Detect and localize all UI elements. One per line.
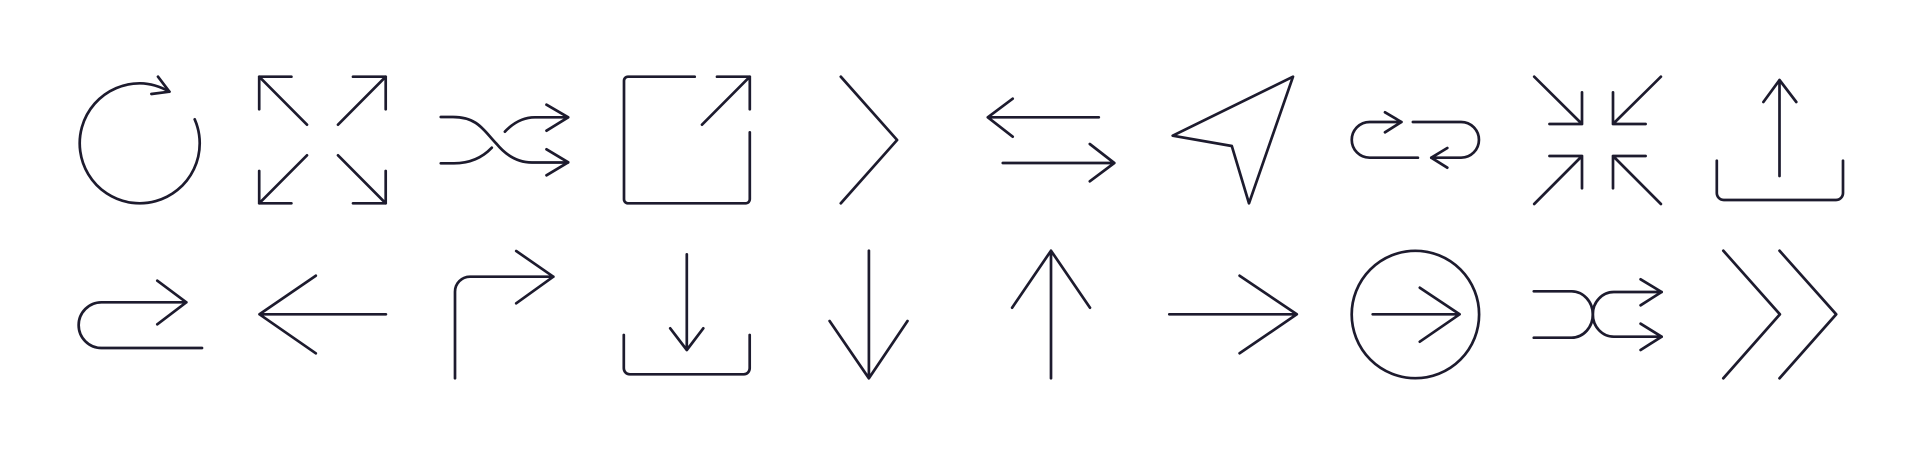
icon: turn right arrow	[455, 251, 553, 378]
icon: circled arrow right	[1352, 251, 1479, 378]
icon: navigation pointer	[1173, 77, 1293, 203]
icon: download tray	[624, 254, 750, 374]
icon: compress four arrows	[1534, 77, 1661, 204]
icon: external link square	[624, 77, 750, 203]
icon: upload tray	[1717, 80, 1843, 200]
icon: repeat loop arrows	[1352, 112, 1479, 168]
icon: expand four arrows	[259, 77, 386, 203]
icon: arrow right	[1169, 276, 1297, 353]
icon: refresh circular arrow	[80, 77, 200, 203]
icon: arrow up	[1012, 251, 1090, 378]
icon: arrow down	[830, 251, 908, 378]
icon: arrow left	[260, 276, 386, 353]
icon: double chevron right	[1723, 251, 1836, 378]
icon: swap left and right arrows	[988, 99, 1114, 181]
icon: shuffle crossing arrows	[441, 105, 568, 175]
icon: U-turn arrow	[79, 281, 202, 348]
icon: bounce-crossing arrows	[1534, 279, 1662, 350]
icon: chevron right	[841, 77, 897, 203]
